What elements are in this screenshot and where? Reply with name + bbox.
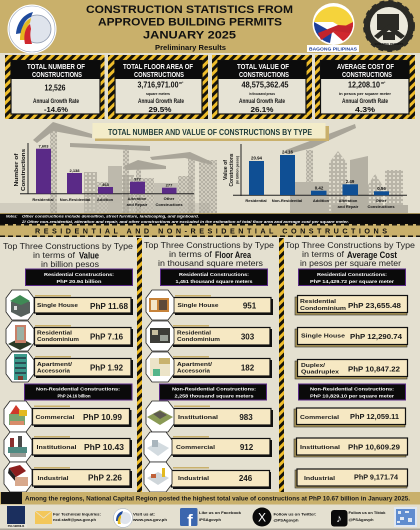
panel: KPI total floor area <box>108 55 208 119</box>
row: industrial: PhP 9,171.74 <box>354 472 398 482</box>
axis title: Value of <box>223 160 229 180</box>
subtotal: residential <box>298 269 406 286</box>
panel: KPI total floor area: 29.5% <box>148 105 172 114</box>
row: institutional <box>146 401 273 432</box>
panel: KPI total number of constructions: 12,526 <box>44 84 66 92</box>
panel: KPI average cost: 4.3% <box>355 105 375 114</box>
category labels: and Repair <box>127 202 148 207</box>
column heading: in thousand square meters <box>158 259 263 268</box>
column heading <box>3 242 133 269</box>
category labels: Addition <box>97 197 114 202</box>
contact: Facebook: Like us on Facebook <box>199 511 241 515</box>
category labels: Residential <box>245 198 267 203</box>
icon: industrial interior <box>144 462 172 492</box>
value labels: 20.94 <box>251 156 263 160</box>
subtotal: non-residential: PhP 10,829.10 per square meter <box>310 394 394 398</box>
value labels: 24.16 <box>282 150 294 154</box>
row: residential condominium: Residential <box>37 330 73 336</box>
icon: institutional isometric campus <box>146 401 174 432</box>
icon: QR code <box>394 507 417 527</box>
column heading: in pesos per square meter <box>300 259 401 268</box>
subtitle: Preliminary Results <box>155 45 226 52</box>
row: commercial <box>4 401 132 432</box>
column heading <box>144 241 274 268</box>
value labels: 0.42 <box>315 186 324 190</box>
panel: KPI average cost: m² <box>381 81 386 85</box>
icon: single house <box>6 290 34 320</box>
callout: key finding strip <box>0 492 420 504</box>
row: apartment / accessoria <box>146 352 272 382</box>
axis title: Constructions <box>229 153 235 186</box>
row: single house: PhP 11.68 <box>90 302 129 311</box>
value labels <box>38 144 173 188</box>
row: residential condominium: Condominium <box>37 337 79 343</box>
title: CONSTRUCTION STATISTICS FROM <box>86 4 293 16</box>
row: institutional: Institutional <box>36 445 77 451</box>
contact: TikTok <box>348 511 386 522</box>
category labels: Addition <box>313 198 330 203</box>
column heading: in billion pesos <box>41 260 99 269</box>
divider: hazard stripes <box>279 238 284 492</box>
row: institutional: PhP 10,609.29 <box>348 442 400 452</box>
subtotal: residential: PhP 14,429.72 per square meter <box>310 279 394 284</box>
icon: X: X <box>258 510 266 524</box>
row: duplex / quadruplex <box>295 360 408 379</box>
contact: email <box>53 512 101 522</box>
title <box>86 4 293 42</box>
illustration: cranes and skyline background <box>0 122 408 213</box>
subtotal: non-residential <box>298 384 406 400</box>
icon: floor plan <box>146 290 174 320</box>
category labels: Other <box>164 196 175 201</box>
category labels: Residential <box>32 197 54 202</box>
row: institutional: Institutional <box>178 415 219 421</box>
value labels: 7,603 <box>38 144 49 148</box>
footer contacts <box>7 506 417 530</box>
axis title: Number of <box>14 153 20 186</box>
subtotal: non-residential <box>24 384 132 400</box>
icon: TikTok <box>331 510 348 526</box>
row: single house <box>146 290 273 320</box>
row: commercial: Commercial <box>300 415 340 421</box>
subtotal: residential <box>160 269 268 286</box>
panel: KPI total number of constructions <box>5 55 104 119</box>
row: single house: Single House <box>178 303 218 309</box>
icon: PSA QR badge: PSA SERBILIS <box>8 525 25 528</box>
category labels: Non-Residential <box>60 197 90 202</box>
heading: total number and value of constructions by type: TOTAL NUMBER AND VALUE OF CONSTRUCTIONS BY TYPE <box>108 127 312 137</box>
subtotal: residential <box>26 269 132 286</box>
row: institutional <box>294 438 408 457</box>
value labels <box>251 150 386 191</box>
row: residential condominium: PhP 23,655.48 <box>348 301 401 310</box>
subtotal: non-residential: PhP 24.16 billion <box>58 394 91 398</box>
subtotal: non-residential: Non-Residential Constructions: <box>36 386 121 392</box>
icon: apartment floor plan <box>146 352 174 382</box>
row: duplex / quadruplex: Duplex/ <box>301 363 326 369</box>
subtotal: non-residential: 2,258 thousand square meters <box>174 394 254 398</box>
axis title: Constructions <box>21 149 27 191</box>
panel: KPI average cost: CONSTRUCTIONS <box>342 72 392 79</box>
row: commercial: Commercial <box>36 415 75 421</box>
panel: KPI total floor area: m² <box>179 81 184 85</box>
row: industrial: Industrial <box>178 476 210 482</box>
subtotal: residential: 1,451 thousand square meters <box>176 279 253 284</box>
row: duplex / quadruplex: Quadruplex <box>301 370 340 376</box>
axis title <box>223 153 240 186</box>
value labels: 2,138 <box>69 168 80 173</box>
row: single house <box>6 290 133 320</box>
row: residential condominium: PhP 7.16 <box>90 332 124 342</box>
column heading: in terms of <box>33 251 76 260</box>
icon: commercial interior <box>144 432 172 462</box>
subtotal: non-residential: Non-Residential Constructions: <box>310 386 395 392</box>
column heading: Floor Area <box>215 250 252 260</box>
icon: building permits gear logo <box>364 1 414 51</box>
contact: email: For Technical Inquiries: <box>53 512 101 516</box>
panel: KPI total number of constructions: TOTAL NUMBER OF <box>27 64 86 71</box>
row: residential condominium <box>6 321 133 351</box>
bars <box>249 155 389 195</box>
contact: Twitter: Follow us on Twitter: <box>274 512 316 516</box>
icon: building permits gear logo: BUILDING PERMITS <box>375 42 403 46</box>
category labels: Other <box>376 198 387 203</box>
subtotal: residential: Residential Constructions: <box>179 272 250 277</box>
panel: KPI average cost: 12,208.10 <box>348 80 380 90</box>
panel: KPI total floor area: Annual Growth Rate <box>138 99 185 105</box>
icon: institutional factory <box>4 432 32 462</box>
icon: envelope <box>35 511 52 524</box>
column heading: Top Three Constructions by Type <box>144 241 274 250</box>
row: industrial <box>144 462 271 492</box>
chart: value of constructions by type <box>223 144 407 209</box>
icon: PSA QR badge <box>7 506 27 528</box>
row: commercial: 912 <box>240 443 254 452</box>
row: industrial: 246 <box>239 474 253 483</box>
contact: TikTok: Follow us on Tiktok <box>348 511 386 515</box>
icon: Bagong Pilipinas logo <box>307 3 359 53</box>
row: single house: PhP 12,290.74 <box>350 332 403 341</box>
row: commercial <box>144 432 272 462</box>
header band <box>0 0 420 54</box>
icon: commercial building <box>4 401 32 432</box>
panel: KPI average cost: in pesos per square meter <box>339 92 392 96</box>
section banner: residential and non-residential constructions: RESIDENTIAL AND NON-RESIDENTIAL CONSTRUCTIONS <box>35 226 387 236</box>
divider: hazard stripes <box>137 238 142 492</box>
column heading: in terms of <box>169 250 213 259</box>
callout: key finding strip: Among the regions, National Capital Region posted the highest total value of constructions at PhP 10.67 billion in January 2025. <box>25 496 410 502</box>
row: single house: Single House <box>301 334 345 340</box>
row: institutional: Institutional <box>300 445 341 451</box>
row: industrial: Industrial <box>304 476 336 482</box>
row: single house: 951 <box>243 302 257 310</box>
title: JANUARY 2025 <box>143 30 236 42</box>
value labels: 277 <box>166 182 173 188</box>
column heading: Top Three Constructions by Type <box>3 242 133 251</box>
row: apartment / accessoria <box>6 352 133 382</box>
row: industrial: Industrial <box>38 476 69 482</box>
row: apartment / accessoria: PhP 1.92 <box>90 364 124 372</box>
row: residential condominium: Condominium <box>177 337 220 343</box>
row: apartment / accessoria: 182 <box>241 364 255 372</box>
contact: Twitter: @PSAgovph <box>274 518 298 522</box>
category labels: Alteration <box>128 196 147 201</box>
row: apartment / accessoria: Accessoria <box>37 368 71 374</box>
value labels: 2.49 <box>346 179 355 184</box>
column heading <box>285 241 415 268</box>
panel: top three by average cost <box>285 241 415 488</box>
contact: website: www.psa.gov.ph <box>132 518 167 522</box>
contact: Facebook <box>199 511 241 522</box>
icon: condominium floor plan <box>146 321 174 351</box>
icon: apartment building <box>6 352 34 382</box>
row: residential condominium <box>295 296 408 315</box>
panel: KPI total floor area: CONSTRUCTIONS <box>134 72 184 79</box>
notes bar: Other constructions include demolition, street furniture, landscaping, and signboard. <box>22 214 199 218</box>
row: commercial <box>294 408 406 427</box>
row: industrial <box>295 469 408 488</box>
category labels <box>32 196 183 207</box>
section banner: residential and non-residential constructions <box>0 224 420 237</box>
row: institutional: PhP 10.43 <box>84 443 125 452</box>
panel: KPI total value: 26.1% <box>250 105 274 114</box>
panel: KPI total floor area: TOTAL FLOOR AREA OF <box>123 64 194 71</box>
title: APPROVED BUILDING PERMITS <box>98 16 282 28</box>
icon: Facebook: f <box>187 511 193 530</box>
row: apartment / accessoria: Apartment/ <box>177 362 213 368</box>
row: industrial: PhP 2.26 <box>88 474 123 482</box>
row: apartment / accessoria: Accessoria <box>177 368 211 374</box>
axis title: (in billion pesos) <box>236 155 240 184</box>
row: commercial: PhP 10.99 <box>83 413 123 422</box>
icon: TikTok: ♪ <box>336 513 342 525</box>
notes bar: 2/ Other non-residential, alteration and repair, and other constructions are excluded in the estimation of total floor area and average cost per square meter. <box>21 220 349 224</box>
panel: KPI average cost: AVERAGE COST OF <box>337 64 395 71</box>
panel: KPI total value: in thousand pesos <box>249 92 275 96</box>
row: single house: Single House <box>37 303 78 309</box>
subtotal: residential: Residential Constructions: <box>317 272 388 277</box>
row: commercial: PhP 12,059.11 <box>350 412 399 421</box>
value labels: 0.56 <box>377 186 386 191</box>
panel: KPI total value: CONSTRUCTIONS <box>239 72 289 79</box>
subtotal: non-residential: Non-Residential Constructions: <box>172 386 257 392</box>
panel: KPI total floor area: 3,716,971.00 <box>138 80 179 90</box>
panel: KPI total floor area: square meters <box>146 92 170 96</box>
category labels: Constructions <box>155 202 183 207</box>
contact: email: ncd.staff@psa.gov.ph <box>53 518 96 522</box>
row: institutional <box>4 432 132 462</box>
category labels: Alteration <box>339 198 358 203</box>
contact: website <box>132 512 167 522</box>
panel: top three by floor area <box>144 241 274 492</box>
contact: TikTok: @PSAgovph <box>348 518 374 522</box>
panel: KPI total number of constructions: CONSTRUCTIONS <box>32 72 82 79</box>
column heading: Average Cost <box>347 250 397 260</box>
row: institutional: 983 <box>239 413 253 422</box>
category labels <box>245 198 395 209</box>
subtotal: non-residential <box>160 384 266 400</box>
row: apartment / accessoria: Apartment/ <box>37 362 73 368</box>
icon: condominium tower <box>6 321 34 351</box>
panel: KPI average cost: Annual Growth Rate <box>342 99 389 105</box>
row: commercial: Commercial <box>176 445 216 451</box>
category labels: Non-Residential <box>272 198 302 203</box>
panel: KPI total number of constructions: -14.6% <box>44 105 68 114</box>
column heading: Top Three Constructions by Type <box>285 241 415 250</box>
row: residential condominium: Residential <box>300 299 337 305</box>
notes bar <box>0 213 420 224</box>
subtotal: residential: Residential Constructions: <box>44 272 115 277</box>
panel: KPI total value <box>212 55 312 119</box>
icon: Facebook <box>180 508 198 530</box>
row: single house <box>295 328 408 347</box>
axis title <box>14 149 27 191</box>
icon: Bagong Pilipinas logo: BAGONG PILIPINAS <box>309 47 358 53</box>
category labels: Constructions <box>367 204 395 209</box>
subtotal: residential: PhP 20.94 billion <box>56 279 102 284</box>
icon: PSA logo <box>8 4 56 54</box>
icon: badge <box>1 492 22 504</box>
panel: KPI total value: TOTAL VALUE OF <box>237 64 290 71</box>
panel: KPI average cost <box>315 55 415 119</box>
panel: top three by value <box>3 242 133 492</box>
icon: X <box>252 508 272 526</box>
contact: website: Visit us at: <box>133 512 155 516</box>
row: residential condominium: Residential <box>177 330 212 336</box>
contact: Twitter <box>274 512 316 522</box>
value labels: 977 <box>134 176 142 182</box>
panel: KPI total value: Annual Growth Rate <box>239 99 286 105</box>
panel: KPI total value: 48,575,362.45 <box>242 80 289 90</box>
bars <box>36 149 176 194</box>
category labels: and Repair <box>338 204 359 209</box>
column heading: in terms of <box>302 250 345 259</box>
row: duplex / quadruplex: PhP 10,847.22 <box>348 364 400 374</box>
column heading: Value <box>79 250 99 260</box>
icon: industrial <box>4 462 32 492</box>
value labels: 463 <box>102 182 110 187</box>
row: residential condominium: 303 <box>241 332 255 342</box>
heading: total number and value of constructions by type <box>92 123 329 141</box>
contact: Facebook: /PSAgovph <box>199 518 221 522</box>
notes bar: Notes: <box>6 214 18 218</box>
row: industrial <box>4 462 132 492</box>
panel: KPI total number of constructions: Annual Growth Rate <box>33 99 80 105</box>
row: residential condominium <box>146 321 272 351</box>
chart: number of constructions by type <box>14 143 194 207</box>
icon: PSA website logo <box>114 508 132 528</box>
row: residential condominium: Condominium <box>300 306 346 312</box>
